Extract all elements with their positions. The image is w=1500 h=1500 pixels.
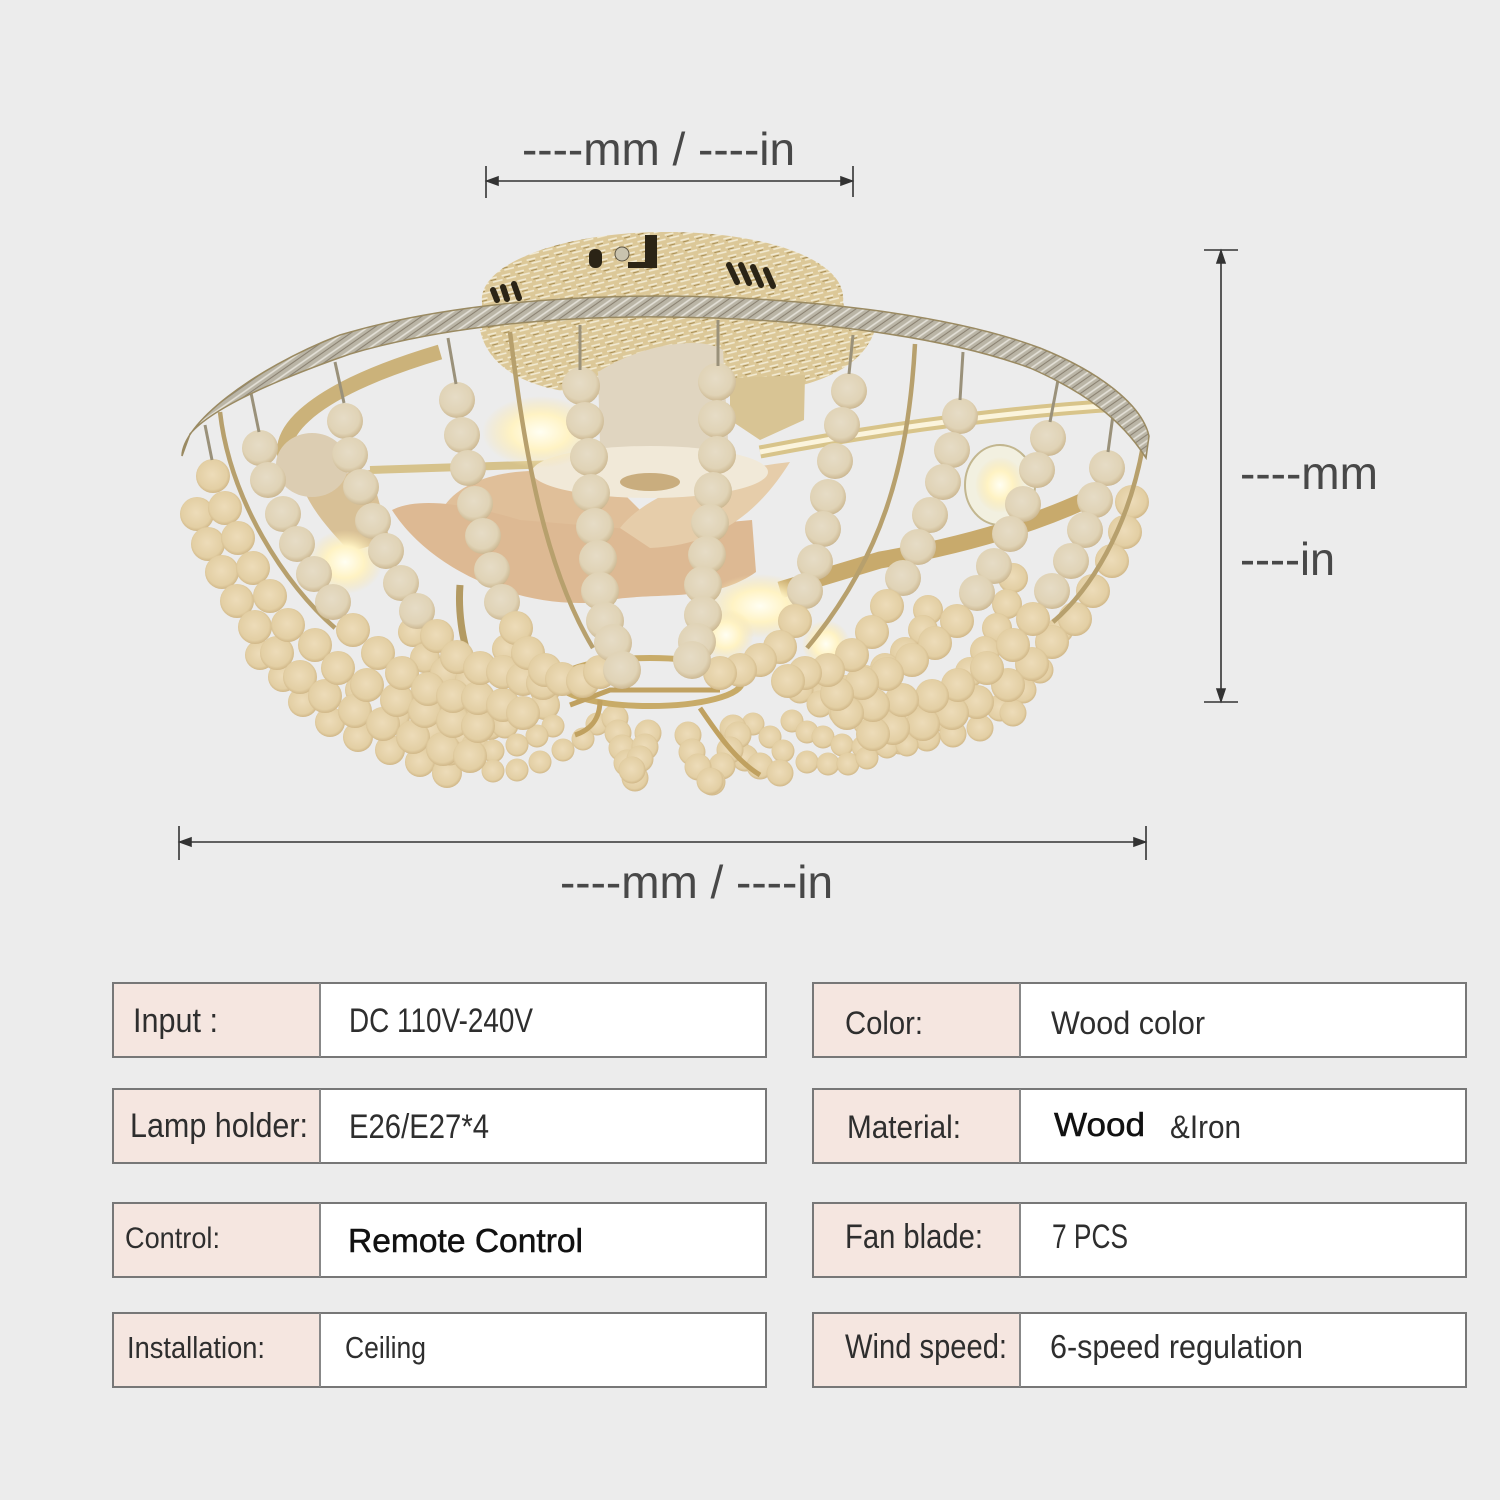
left wood bracket — [300, 470, 390, 552]
product: beaded ceiling fan light — [182, 232, 1149, 782]
row: wind speed — [813, 1313, 1466, 1387]
row: lamp holder — [113, 1089, 766, 1163]
outer metal rim band — [182, 296, 1149, 458]
arrow: top width — [486, 166, 853, 198]
row: material: Material: — [847, 1109, 961, 1145]
arrow: height — [1204, 250, 1238, 702]
row: input: Input : — [133, 1002, 218, 1040]
row: lamp holder: Lamp holder: — [130, 1107, 308, 1145]
label: height in: ----in — [1240, 533, 1335, 585]
row: material: &Iron — [1170, 1109, 1241, 1145]
row: installation — [113, 1313, 766, 1387]
bottom gold ring — [558, 658, 760, 775]
back bead strands — [260, 578, 1060, 773]
light bulbs — [307, 396, 1035, 668]
row: fan blade — [813, 1203, 1466, 1277]
lower mount plate — [480, 330, 875, 395]
label: height mm: ----mm — [1240, 447, 1378, 499]
inner ring back arc — [284, 352, 1120, 660]
row: color: Wood color — [1051, 1005, 1205, 1041]
row: input: DC 110V-240V — [349, 1002, 533, 1040]
row: input — [113, 983, 766, 1057]
fan hub disc — [532, 446, 768, 498]
row: fan blade: Fan blade: — [845, 1218, 983, 1256]
row: color: Color: — [845, 1005, 923, 1041]
row: color — [813, 983, 1466, 1057]
row: installation: Ceiling — [345, 1330, 426, 1365]
row: control: Control: — [125, 1222, 220, 1255]
gold bracket — [730, 375, 805, 440]
row: wind speed: 6-speed regulation — [1050, 1328, 1303, 1365]
panel: spec table right — [813, 983, 1466, 1387]
front bead strands — [260, 382, 1107, 713]
row: control: Remote Control — [348, 1222, 583, 1259]
row: control — [113, 1203, 766, 1277]
label: top dimension: ----mm / ----in — [522, 123, 795, 175]
top width dimension — [486, 123, 853, 198]
canopy mount — [482, 232, 850, 330]
wood disc — [276, 433, 348, 497]
row: wind speed: Wind speed: — [845, 1328, 1007, 1366]
row: installation: Installation: — [127, 1330, 265, 1365]
row: lamp holder: E26/E27*4 — [349, 1108, 489, 1146]
row: material — [813, 1089, 1466, 1163]
height dimension — [1204, 250, 1378, 702]
label: bottom dimension: ----mm / ----in — [560, 856, 833, 908]
fan blade: main — [392, 503, 756, 603]
arrow: overall width — [179, 826, 1146, 860]
row: material: Wood — [1054, 1106, 1145, 1143]
fan hub centre — [620, 473, 680, 491]
lower small bead strands — [470, 718, 907, 782]
panel: spec table left — [113, 983, 766, 1387]
fan blade: upper left — [445, 471, 650, 560]
bottom width dimension — [179, 826, 1146, 908]
wood drum — [598, 343, 728, 461]
row: fan blade: 7 PCS — [1052, 1218, 1128, 1256]
bead hooks — [205, 320, 1113, 460]
fan blade: right — [620, 462, 790, 548]
outer bead strands — [197, 476, 1132, 756]
wire ribs — [220, 332, 1143, 648]
